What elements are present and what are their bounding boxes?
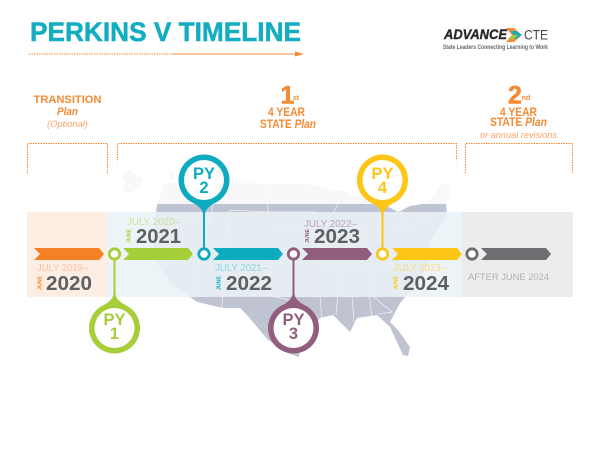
date: 2024 xyxy=(394,263,450,295)
heading: first 4 year state plan: 1 xyxy=(281,82,295,110)
date: 2020: JULY 2019– xyxy=(37,263,88,274)
heading: second 4 year state plan: nd xyxy=(522,95,530,102)
heading: transition plan: (Optional) xyxy=(47,119,88,130)
date: 2020: JUNE xyxy=(38,275,44,290)
heading: second 4 year state plan: 2 xyxy=(508,82,522,110)
pin: PY 2 xyxy=(178,154,230,259)
date: 2024: JUNE xyxy=(394,275,400,290)
heading: second 4 year state plan: 4 YEAR xyxy=(500,107,538,119)
date: 2022: JULY 2021– xyxy=(215,263,267,274)
arrow: PY2 year xyxy=(123,248,193,260)
arrow: after June 2024 xyxy=(481,248,551,260)
heading: transition plan: TRANSITION xyxy=(34,94,102,106)
pin: PY 1: PY xyxy=(103,311,126,329)
pin: PY 4 xyxy=(357,154,408,259)
date: 2021: 2021 xyxy=(136,226,181,248)
heading: transition plan: Plan xyxy=(57,106,78,118)
title arrow xyxy=(29,52,304,56)
fade over the northern map xyxy=(110,160,460,204)
arrow: PY4 year xyxy=(302,248,372,260)
date: after June 2024: AFTER JUNE 2024 xyxy=(468,272,549,283)
date: 2023 xyxy=(304,219,360,248)
date: 2021: JULY 2020– xyxy=(127,217,180,228)
logo: Advance CTE xyxy=(443,26,549,51)
heading: first 4 year state plan: st xyxy=(293,95,300,102)
arrow: PY5 year xyxy=(392,248,462,260)
arrow: PY3 year xyxy=(213,248,283,260)
date: 2020: 2020 xyxy=(46,273,92,295)
date: 2024: JULY 2023– xyxy=(394,263,446,274)
date: 2023: JUNE xyxy=(305,228,311,243)
date: 2022 xyxy=(215,263,272,295)
heading: second 4 year state plan: STATE Plan xyxy=(490,117,547,129)
bracket: first state plan xyxy=(118,144,456,173)
date: 2022: 2022 xyxy=(226,273,272,295)
heading: second 4 year state plan xyxy=(480,82,557,141)
pin: PY 2: PY xyxy=(193,165,215,183)
pin: PY 1 xyxy=(89,249,140,354)
band: transition year xyxy=(27,212,107,297)
title: PERKINS V TIMELINE xyxy=(30,17,301,47)
date: 2021: JUNE xyxy=(126,228,132,243)
pin: PY 1: 1 xyxy=(110,325,119,343)
logo: Advance CTE: CTE xyxy=(524,26,548,42)
arrow: PY1 year xyxy=(34,248,104,260)
pin: PY 4: PY xyxy=(371,165,394,183)
bracket: transition xyxy=(28,144,108,173)
heading: transition plan xyxy=(34,94,102,130)
date: 2020 xyxy=(37,263,92,295)
date: 2023: 2023 xyxy=(314,226,360,248)
pin: PY 2: 2 xyxy=(199,179,209,197)
date: 2021 xyxy=(126,217,181,248)
map: United States xyxy=(110,160,460,357)
pin: PY 3: PY xyxy=(282,311,305,329)
pin: PY 3 xyxy=(268,249,319,354)
bracket: second state plan xyxy=(466,144,572,173)
heading: second 4 year state plan: or annual revisions xyxy=(480,130,557,141)
date: 2024: 2024 xyxy=(403,273,450,295)
logo: Advance CTE: State Leaders Connecting Learning to Work xyxy=(443,45,549,51)
heading: first 4 year state plan xyxy=(260,82,316,131)
pin: PY 3: 3 xyxy=(289,325,298,343)
band: after June 2024 xyxy=(462,212,573,297)
pin: PY 4: 4 xyxy=(378,179,388,197)
heading: first 4 year state plan: 4 YEAR xyxy=(268,107,306,119)
node: after June 2024 xyxy=(467,249,477,259)
date: 2023: JULY 2022– xyxy=(304,219,357,230)
date: 2022: JUNE xyxy=(216,275,222,290)
logo: Advance CTE: ADVANCE xyxy=(443,26,508,42)
heading: first 4 year state plan: STATE Plan xyxy=(260,119,316,131)
band: first state plan years xyxy=(107,212,462,297)
